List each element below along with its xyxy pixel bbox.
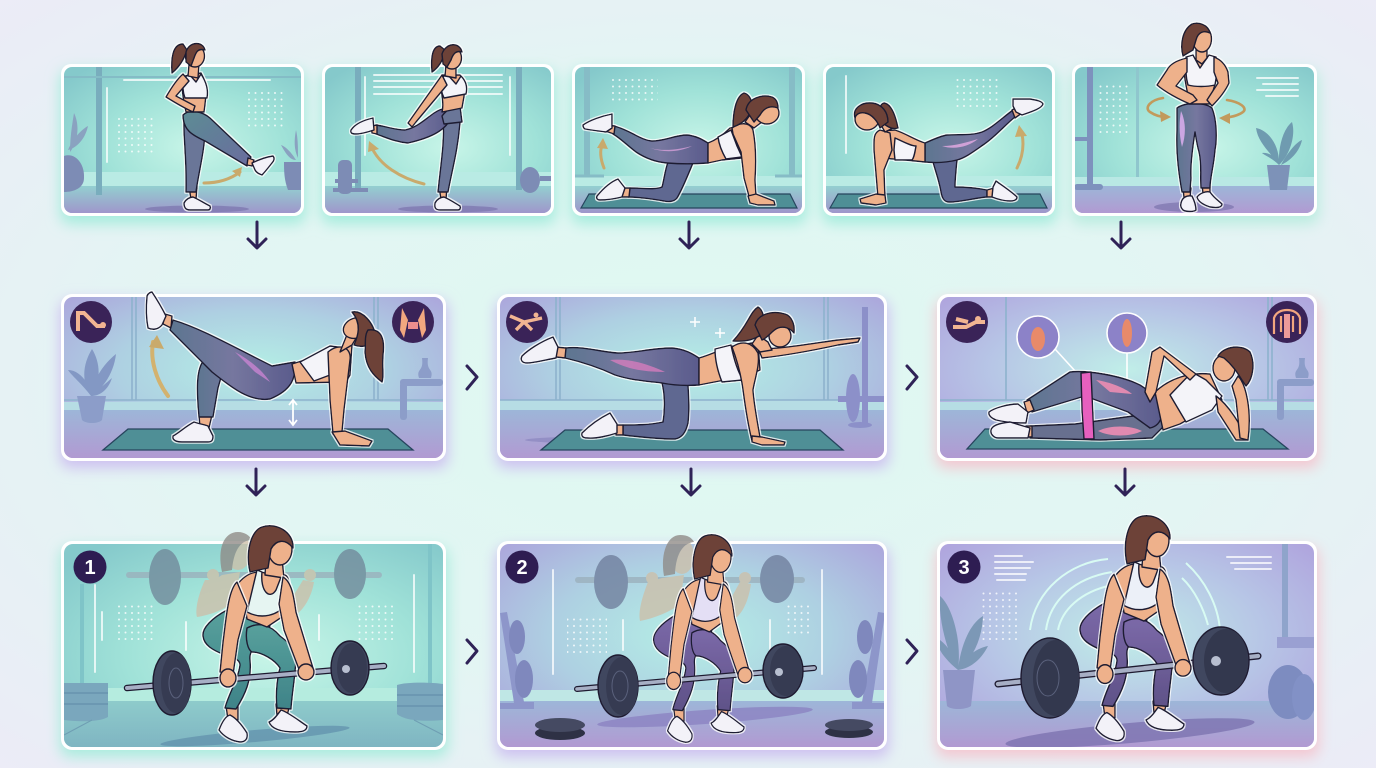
- gym background: [940, 297, 1314, 458]
- motion arrow: [597, 138, 608, 168]
- gym background: [826, 67, 1052, 213]
- icon: side plank badge: [946, 301, 988, 343]
- motion arrow: [204, 167, 242, 183]
- exercise mat: [581, 194, 797, 208]
- figure: standing kick forward: [166, 43, 274, 210]
- panel: deadlift step 3: [937, 516, 1317, 754]
- panel: glute bridge single leg: [61, 292, 446, 461]
- step number badge: [506, 550, 538, 584]
- figure: kickback high: [854, 99, 1043, 205]
- step number badge: 3: [958, 557, 970, 579]
- icon: bird dog badge: [506, 301, 548, 343]
- arrow: row two down centre: [682, 469, 700, 495]
- step number badge: [74, 550, 106, 584]
- step number badge: 1: [84, 557, 96, 579]
- figure arms gripping bar: [220, 577, 314, 687]
- arrow: row two right one: [467, 366, 477, 389]
- arrow: row one down right: [1112, 222, 1130, 248]
- gym background: [325, 65, 552, 213]
- arrow: row two right two: [907, 366, 917, 389]
- icon: back muscle badge: [1266, 301, 1308, 343]
- icon: muscle badge: [392, 301, 434, 343]
- figure body: legs and torso: [654, 535, 744, 742]
- exercise mat: [830, 194, 1047, 208]
- arrow: row one down centre: [680, 222, 698, 248]
- arrow: row three right one: [467, 640, 477, 663]
- arrow: row three right two: [907, 640, 917, 663]
- barbell: [577, 644, 814, 717]
- arrow: row two down right: [1116, 469, 1134, 495]
- step number badge: [948, 550, 980, 584]
- arrow: row two down left: [247, 469, 265, 495]
- figure arms gripping bar: [667, 584, 752, 690]
- barbell: [127, 641, 384, 715]
- weight plates on floor: [535, 718, 873, 740]
- panel: standing front leg raise: [61, 43, 304, 216]
- exercise mat: [967, 429, 1288, 449]
- callout: outer glute: [1017, 316, 1076, 372]
- exercise mat: [541, 430, 843, 450]
- gym background: [500, 544, 885, 747]
- figure: side lying: [989, 347, 1253, 440]
- figure body: legs and torso: [203, 526, 307, 742]
- panel: standing hip rotation: [1072, 23, 1317, 216]
- panel: standing back leg raise: [322, 45, 554, 216]
- motion arrow: [368, 141, 424, 184]
- panel: deadlift step 1: [61, 526, 446, 750]
- figure body: legs and torso: [1080, 516, 1184, 741]
- gym background: [500, 297, 884, 458]
- small bounce arrow: [289, 400, 297, 425]
- gym background: [1074, 65, 1314, 213]
- panel: bird dog: [497, 294, 887, 461]
- gym background: [575, 65, 802, 213]
- icon: bridge badge: [70, 301, 112, 343]
- figure: bridge: [146, 292, 384, 446]
- ghost top position: [575, 535, 805, 621]
- exercise mat: [103, 429, 413, 450]
- figure: front stance: [1157, 23, 1229, 211]
- panel: deadlift step 2: [497, 535, 887, 750]
- step number badge: 2: [516, 557, 528, 579]
- figure: standing kick back: [351, 45, 467, 210]
- panel: all-fours kickback left facing: [823, 64, 1055, 216]
- panel: all-fours kickback right facing: [572, 64, 805, 216]
- rotation arrows: [1148, 98, 1245, 124]
- gym background: [940, 544, 1316, 754]
- sparkle marks: [690, 317, 725, 338]
- figure: kickback: [583, 93, 779, 205]
- ghost top position: [126, 532, 382, 617]
- gym background: [64, 297, 443, 458]
- gym background: [64, 65, 302, 213]
- callout: mid glute: [1107, 313, 1147, 395]
- motion arrow: [1015, 125, 1027, 168]
- figure arms gripping bar: [1097, 569, 1191, 683]
- panel: side lying band: [937, 294, 1317, 461]
- barbell: [998, 627, 1258, 718]
- arrow: row one down left: [248, 222, 266, 248]
- gym background: [64, 544, 443, 750]
- motion arrow: [149, 335, 168, 396]
- figure: bird dog: [521, 307, 860, 445]
